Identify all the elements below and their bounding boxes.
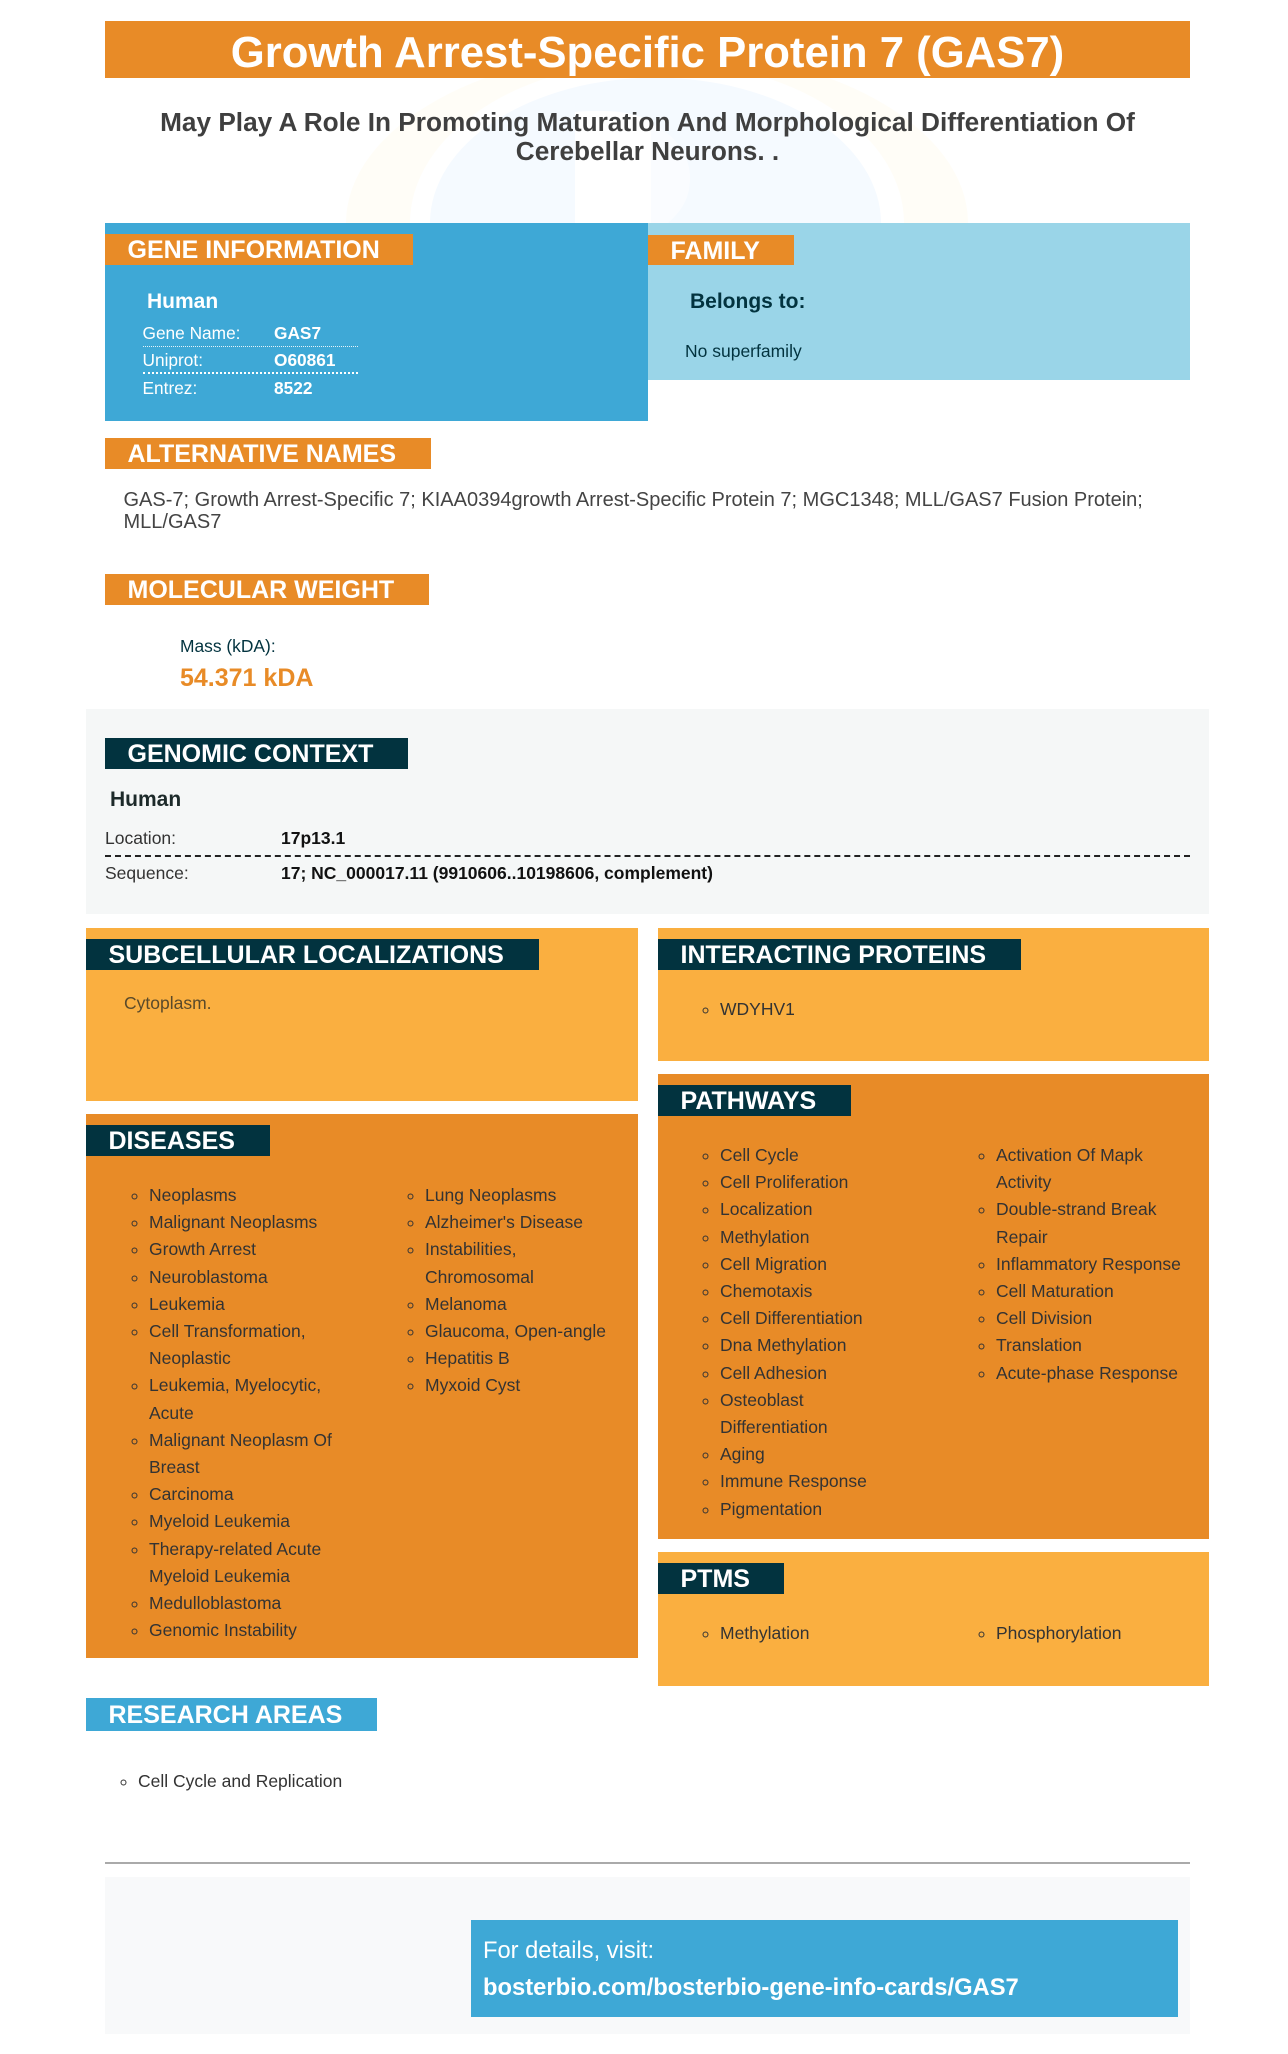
- pathways list column 1: Aging: [720, 1444, 765, 1464]
- diseases list column 2: Melanoma: [425, 1294, 507, 1314]
- pathways list column 2: Double-strand Break: [996, 1199, 1156, 1219]
- gene name row: [142, 323, 358, 347]
- pathways list column 1: Cell Proliferation: [720, 1172, 848, 1192]
- diseases list column 1: Neoplasms: [149, 1185, 237, 1205]
- diseases list column 1: Myeloid Leukemia: [149, 1511, 290, 1531]
- pathways list column 1: Cell Migration: [720, 1254, 827, 1274]
- pathways list column 1: Immune Response: [720, 1471, 867, 1491]
- diseases list column 1: [132, 1185, 332, 1640]
- heading: genomic context: GENOMIC CONTEXT: [128, 740, 373, 768]
- diseases list column 1: Malignant Neoplasms: [149, 1212, 317, 1232]
- diseases list column 2: Glaucoma, Open-angle: [425, 1321, 606, 1341]
- subtitle: [160, 107, 1135, 166]
- heading: ptms: PTMS: [680, 1565, 750, 1593]
- pathways list column 2: Inflammatory Response: [996, 1254, 1181, 1274]
- pathways list column 1: Methylation: [720, 1227, 810, 1247]
- mass label: Mass (kDA):: [180, 636, 276, 656]
- localization text: Cytoplasm.: [124, 993, 212, 1013]
- pathways list column 1: Dna Methylation: [720, 1335, 846, 1355]
- gene name row: Gene Name:: [142, 323, 240, 343]
- diseases list column 1: Growth Arrest: [149, 1239, 256, 1259]
- pathways list column 1: Chemotaxis: [720, 1281, 812, 1301]
- subtitle: Cerebellar Neurons. .: [516, 136, 779, 166]
- heading: molecular weight: MOLECULAR WEIGHT: [128, 576, 394, 604]
- heading: gene information: GENE INFORMATION: [128, 236, 380, 264]
- pathways list column 1: Pigmentation: [720, 1499, 822, 1519]
- pathways list column 2: Translation: [996, 1335, 1082, 1355]
- belongs to label: Belongs to:: [690, 290, 806, 313]
- diseases list column 1: Cell Transformation,: [149, 1321, 306, 1341]
- details url: bosterbio.com/bosterbio-gene-info-cards/GAS7: [483, 1974, 1019, 2001]
- diseases list column 1: Neuroblastoma: [149, 1267, 268, 1287]
- entrez row: [142, 378, 312, 398]
- location row: [105, 828, 345, 848]
- heading: diseases: [86, 1125, 270, 1156]
- diseases list column 2: Lung Neoplasms: [425, 1185, 556, 1205]
- diseases list column 2: Chromosomal: [425, 1267, 534, 1287]
- diseases list column 1: Genomic Instability: [149, 1620, 297, 1640]
- panel: genomic context: [86, 709, 1209, 914]
- diseases list column 1: Leukemia: [149, 1294, 225, 1314]
- title banner: [105, 21, 1190, 78]
- species label: Human: [147, 290, 218, 313]
- panel: diseases: [86, 1114, 638, 1658]
- heading: family: [648, 235, 794, 265]
- diseases list column 2: Instabilities,: [425, 1239, 516, 1259]
- divider line: [105, 1862, 1190, 1864]
- panel: footer: [105, 1877, 1190, 2034]
- panel: pathways: [658, 1074, 1209, 1539]
- pathways list column 2: Acute-phase Response: [996, 1363, 1178, 1383]
- alternative names text: [124, 489, 1143, 533]
- species label: Human: [110, 788, 181, 811]
- diseases list column 1: Neoplastic: [149, 1348, 231, 1368]
- panel: gene information: [105, 223, 648, 421]
- callout: details link: [471, 1920, 1178, 2017]
- row divider: [105, 855, 1190, 857]
- pathways list column 1: Cell Adhesion: [720, 1363, 827, 1383]
- location row: Location:: [105, 828, 176, 848]
- heading: research areas: [86, 1698, 377, 1731]
- diseases list column 2: Hepatitis B: [425, 1348, 510, 1368]
- watermark logo: [430, 78, 881, 223]
- pathways list column 1: Cell Cycle: [720, 1145, 799, 1165]
- pathways list column 2: Activation Of Mapk: [996, 1145, 1143, 1165]
- panel: subcellular localizations: [86, 928, 638, 1101]
- panel: family: [648, 223, 1190, 380]
- heading: research areas: RESEARCH AREAS: [108, 1701, 342, 1729]
- pathways list column 2: Cell Division: [996, 1308, 1092, 1328]
- diseases list column 1: Malignant Neoplasm Of: [149, 1430, 332, 1450]
- pathways list column 1: Localization: [720, 1199, 812, 1219]
- diseases list column 1: Myeloid Leukemia: [149, 1566, 290, 1586]
- diseases list column 2: Myxoid Cyst: [425, 1375, 520, 1395]
- diseases list column 1: Carcinoma: [149, 1484, 234, 1504]
- research areas list: Cell Cycle and Replication: [138, 1771, 342, 1791]
- diseases list column 1: Leukemia, Myelocytic,: [149, 1375, 321, 1395]
- pathways list column 2: [978, 1145, 1181, 1383]
- heading: pathways: PATHWAYS: [680, 1087, 816, 1115]
- panel: ptms: [658, 1552, 1209, 1686]
- heading: family: FAMILY: [670, 237, 760, 265]
- pathways list column 2: Activity: [996, 1172, 1051, 1192]
- ptms list column 2: Phosphorylation: [996, 1623, 1122, 1643]
- pathways list column 1: Osteoblast: [720, 1390, 804, 1410]
- mass value: 54.371 kDA: [180, 664, 313, 692]
- superfamily text: No superfamily: [685, 341, 802, 361]
- heading: alternative names: ALTERNATIVE NAMES: [128, 440, 396, 468]
- entrez row: Entrez:: [142, 378, 197, 398]
- sequence row: Sequence:: [105, 863, 189, 883]
- pathways list column 1: [702, 1145, 867, 1519]
- pathways list column 1: Cell Differentiation: [720, 1308, 863, 1328]
- heading: interacting proteins: INTERACTING PROTEINS: [680, 941, 986, 969]
- heading: subcellular localizations: SUBCELLULAR LOCALIZATIONS: [108, 941, 504, 969]
- subtitle: May Play A Role In Promoting Maturation And Morphological Differentiation Of: [160, 107, 1135, 137]
- uniprot row: [142, 350, 358, 374]
- details label: For details, visit:: [483, 1938, 654, 1964]
- heading: diseases: DISEASES: [108, 1127, 235, 1155]
- heading: pathways: [658, 1085, 851, 1116]
- pathways list column 1: Differentiation: [720, 1417, 828, 1437]
- heading: ptms: [658, 1563, 784, 1594]
- title banner: Growth Arrest-Specific Protein 7 (GAS7): [231, 28, 1064, 77]
- diseases list column 1: Medulloblastoma: [149, 1593, 281, 1613]
- sequence row: 17; NC_000017.11 (9910606..10198606, complement): [281, 863, 713, 883]
- location row: 17p13.1: [281, 828, 345, 848]
- pathways list column 2: Cell Maturation: [996, 1281, 1114, 1301]
- diseases list column 2: [408, 1185, 606, 1395]
- panel: interacting proteins: [658, 928, 1209, 1061]
- diseases list column 1: Breast: [149, 1457, 200, 1477]
- uniprot row: Uniprot:: [142, 350, 203, 370]
- diseases list column 1: Therapy-related Acute: [149, 1539, 321, 1559]
- ptms list column 1: Methylation: [720, 1623, 810, 1643]
- entrez row: 8522: [274, 378, 312, 398]
- pathways list column 2: Repair: [996, 1227, 1048, 1247]
- alternative names text: MLL/GAS7: [124, 511, 221, 533]
- uniprot row: O60861: [274, 350, 336, 370]
- diseases list column 1: Acute: [149, 1403, 194, 1423]
- alternative names text: GAS-7; Growth Arrest-Specific 7; KIAA0394growth Arrest-Specific Protein 7; MGC1348; MLL/GAS7 Fusion Protein;: [124, 489, 1143, 511]
- diseases list column 2: Alzheimer's Disease: [425, 1212, 583, 1232]
- interacting proteins list: WDYHV1: [720, 999, 795, 1019]
- gene name row: GAS7: [274, 323, 321, 343]
